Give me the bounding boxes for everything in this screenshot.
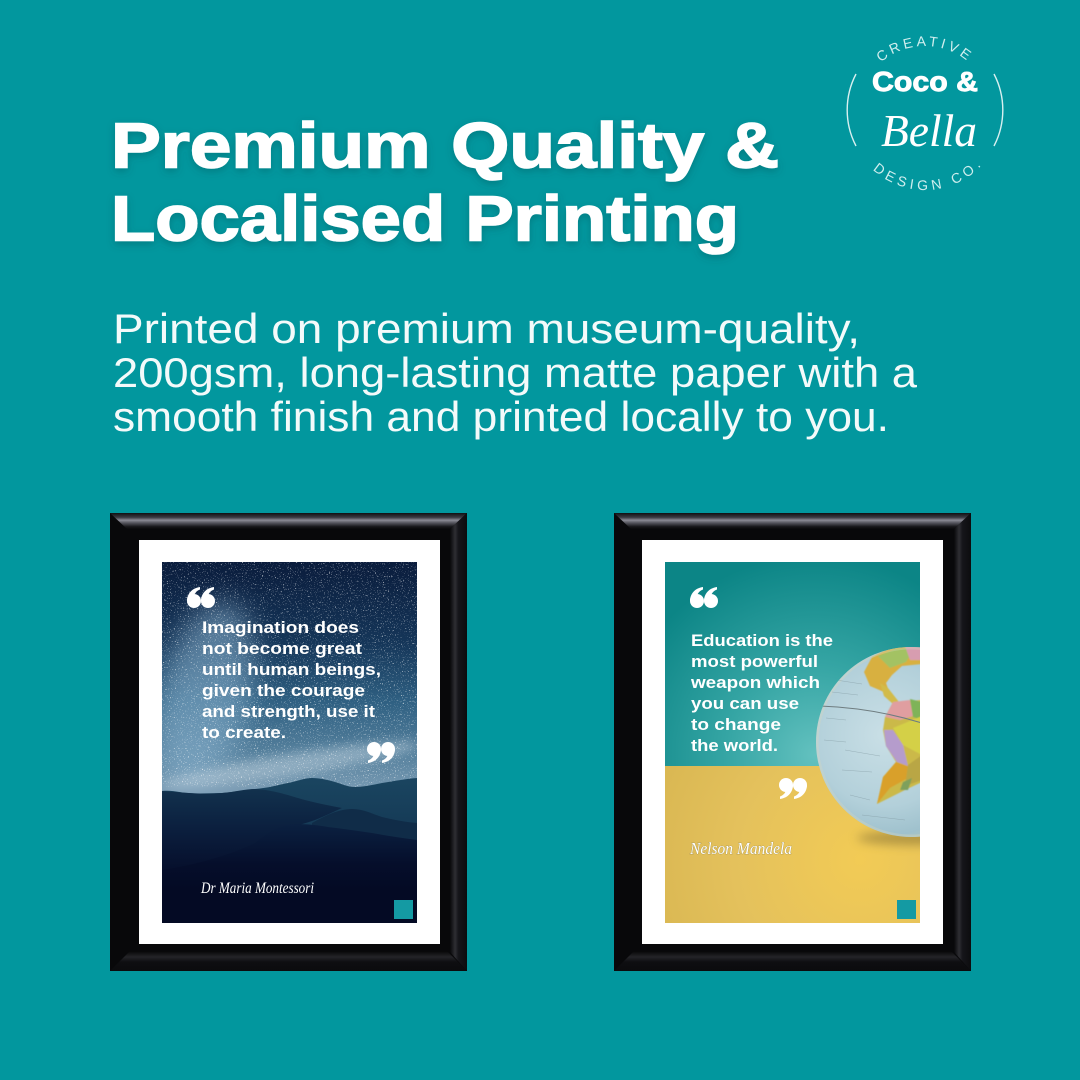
frame bbox=[110, 513, 467, 971]
quote text bbox=[690, 631, 833, 755]
title bbox=[111, 110, 779, 254]
quote mark close bbox=[779, 778, 807, 799]
quote mark open bbox=[690, 587, 718, 608]
quote text: to create. bbox=[202, 723, 286, 742]
milky way glow bbox=[162, 588, 269, 779]
yellow table bbox=[665, 766, 920, 923]
badge bbox=[897, 900, 916, 919]
description text: Printed on premium museum-quality, bbox=[113, 305, 860, 352]
white mat bbox=[642, 540, 943, 944]
framed poster: Mandela bbox=[614, 513, 1006, 971]
map lines bbox=[824, 680, 905, 820]
globe shadow bbox=[856, 828, 920, 850]
logo name Bella: Bella bbox=[881, 105, 977, 156]
logo right bracket arc bbox=[994, 74, 1003, 146]
logo left bracket arc bbox=[847, 74, 856, 146]
logo CREATIVE arc text: CREATIVE bbox=[877, 36, 972, 60]
South America base bbox=[877, 700, 922, 804]
teal wall bbox=[665, 562, 920, 766]
quote text: weapon which bbox=[690, 673, 820, 692]
quote mark open bbox=[187, 587, 215, 608]
cream rim bbox=[816, 647, 920, 837]
quote text: and strength, use it bbox=[202, 702, 375, 721]
star field bbox=[162, 562, 417, 787]
equator line bbox=[820, 706, 925, 724]
quote text: you can use bbox=[691, 694, 799, 713]
attribution: Nelson Mandela bbox=[689, 839, 792, 858]
North America bbox=[864, 647, 920, 692]
logo: Coco & Bella Design Co. bbox=[846, 36, 1004, 190]
title: Localised Printing bbox=[111, 182, 739, 254]
quote text: the world. bbox=[691, 736, 778, 755]
quote text: to change bbox=[691, 715, 781, 734]
poster: globe bbox=[665, 562, 920, 923]
attribution: Dr Maria Montessori bbox=[200, 880, 314, 897]
quote text: Imagination does bbox=[202, 618, 359, 637]
description text: smooth finish and printed locally to you. bbox=[113, 393, 889, 440]
description text bbox=[113, 305, 918, 440]
globe bbox=[816, 647, 920, 837]
badge bbox=[394, 900, 413, 919]
quote text: until human beings, bbox=[202, 660, 381, 679]
framed poster: Montessori bbox=[110, 513, 467, 971]
mountains bbox=[162, 778, 417, 923]
poster: night sky bbox=[138, 562, 420, 923]
quote text: most powerful bbox=[691, 652, 818, 671]
white mat bbox=[139, 540, 440, 944]
frame bbox=[614, 513, 971, 971]
logo name Coco &: Coco & bbox=[872, 66, 978, 97]
quote text: Education is the bbox=[691, 631, 833, 650]
title: Premium Quality & bbox=[111, 110, 779, 182]
quote text: not become great bbox=[202, 639, 362, 658]
description text: 200gsm, long-lasting matte paper with a bbox=[113, 349, 918, 396]
quote text bbox=[202, 618, 381, 742]
quote text: given the courage bbox=[202, 681, 365, 700]
quote mark close bbox=[367, 742, 395, 763]
logo DESIGN CO. arc text: DESIGN CO. bbox=[874, 162, 980, 190]
